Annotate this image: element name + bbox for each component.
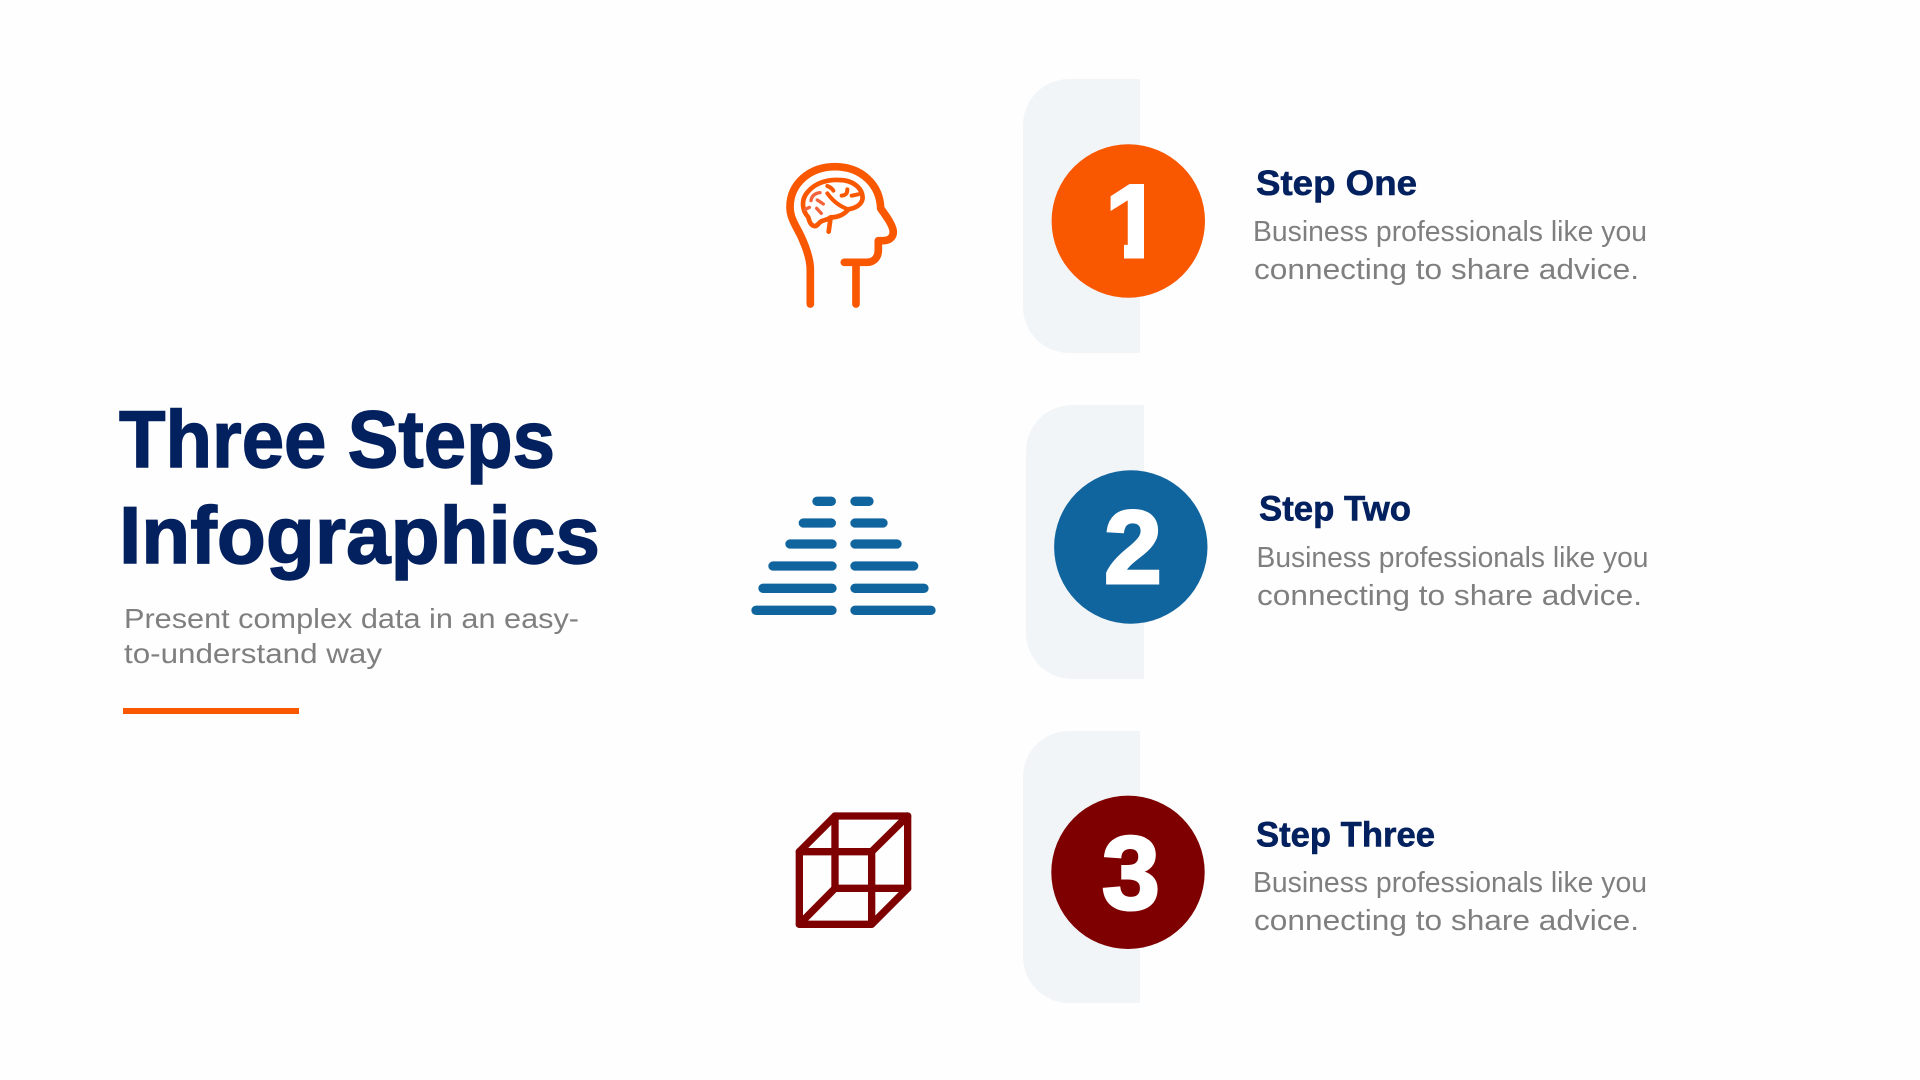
title: Infographics — [119, 491, 600, 581]
icon: wireframe cube — [799, 816, 908, 924]
title block — [119, 395, 600, 714]
subtitle: Present complex data in an easy- — [124, 603, 579, 634]
text block: step one — [1253, 216, 1647, 286]
title — [119, 395, 600, 581]
number badge: 2 — [1054, 470, 1208, 624]
infographic canvas — [119, 79, 1647, 1003]
accent underline — [123, 708, 299, 714]
text block: step three — [1253, 867, 1647, 937]
icon: stacked bars pyramid — [756, 501, 931, 610]
text block: step three: connecting to share advice. — [1254, 905, 1639, 937]
number badge: 3: 3 — [1102, 816, 1160, 932]
panel: step two backdrop — [1026, 405, 1144, 679]
text block: step two — [1256, 542, 1648, 612]
number badge: 1: 1 — [1105, 164, 1163, 280]
heading: step two: Step Two — [1259, 490, 1411, 528]
subtitle: to-understand way — [124, 638, 382, 669]
heading: step one: Step One — [1256, 164, 1417, 203]
heading: step three: Step Three — [1256, 816, 1435, 854]
text block: step one: connecting to share advice. — [1254, 254, 1639, 286]
text block: step three: Business professionals like you — [1253, 867, 1647, 899]
icon: head with brain — [790, 167, 893, 304]
number badge: 1 — [1052, 144, 1205, 298]
panel: step one backdrop — [1023, 79, 1140, 353]
number badge: 3 — [1051, 796, 1205, 949]
text block: step one: Business professionals like you — [1253, 216, 1647, 248]
panel: step three backdrop — [1023, 731, 1140, 1003]
step two — [1026, 405, 1648, 679]
text block: step two: connecting to share advice. — [1257, 580, 1642, 612]
subtitle — [124, 603, 579, 669]
text block: step two: Business professionals like you — [1256, 542, 1648, 574]
title: Three Steps — [119, 395, 555, 485]
step three — [1023, 731, 1647, 1003]
step one — [1023, 79, 1647, 353]
number badge: 2: 2 — [1104, 490, 1162, 606]
